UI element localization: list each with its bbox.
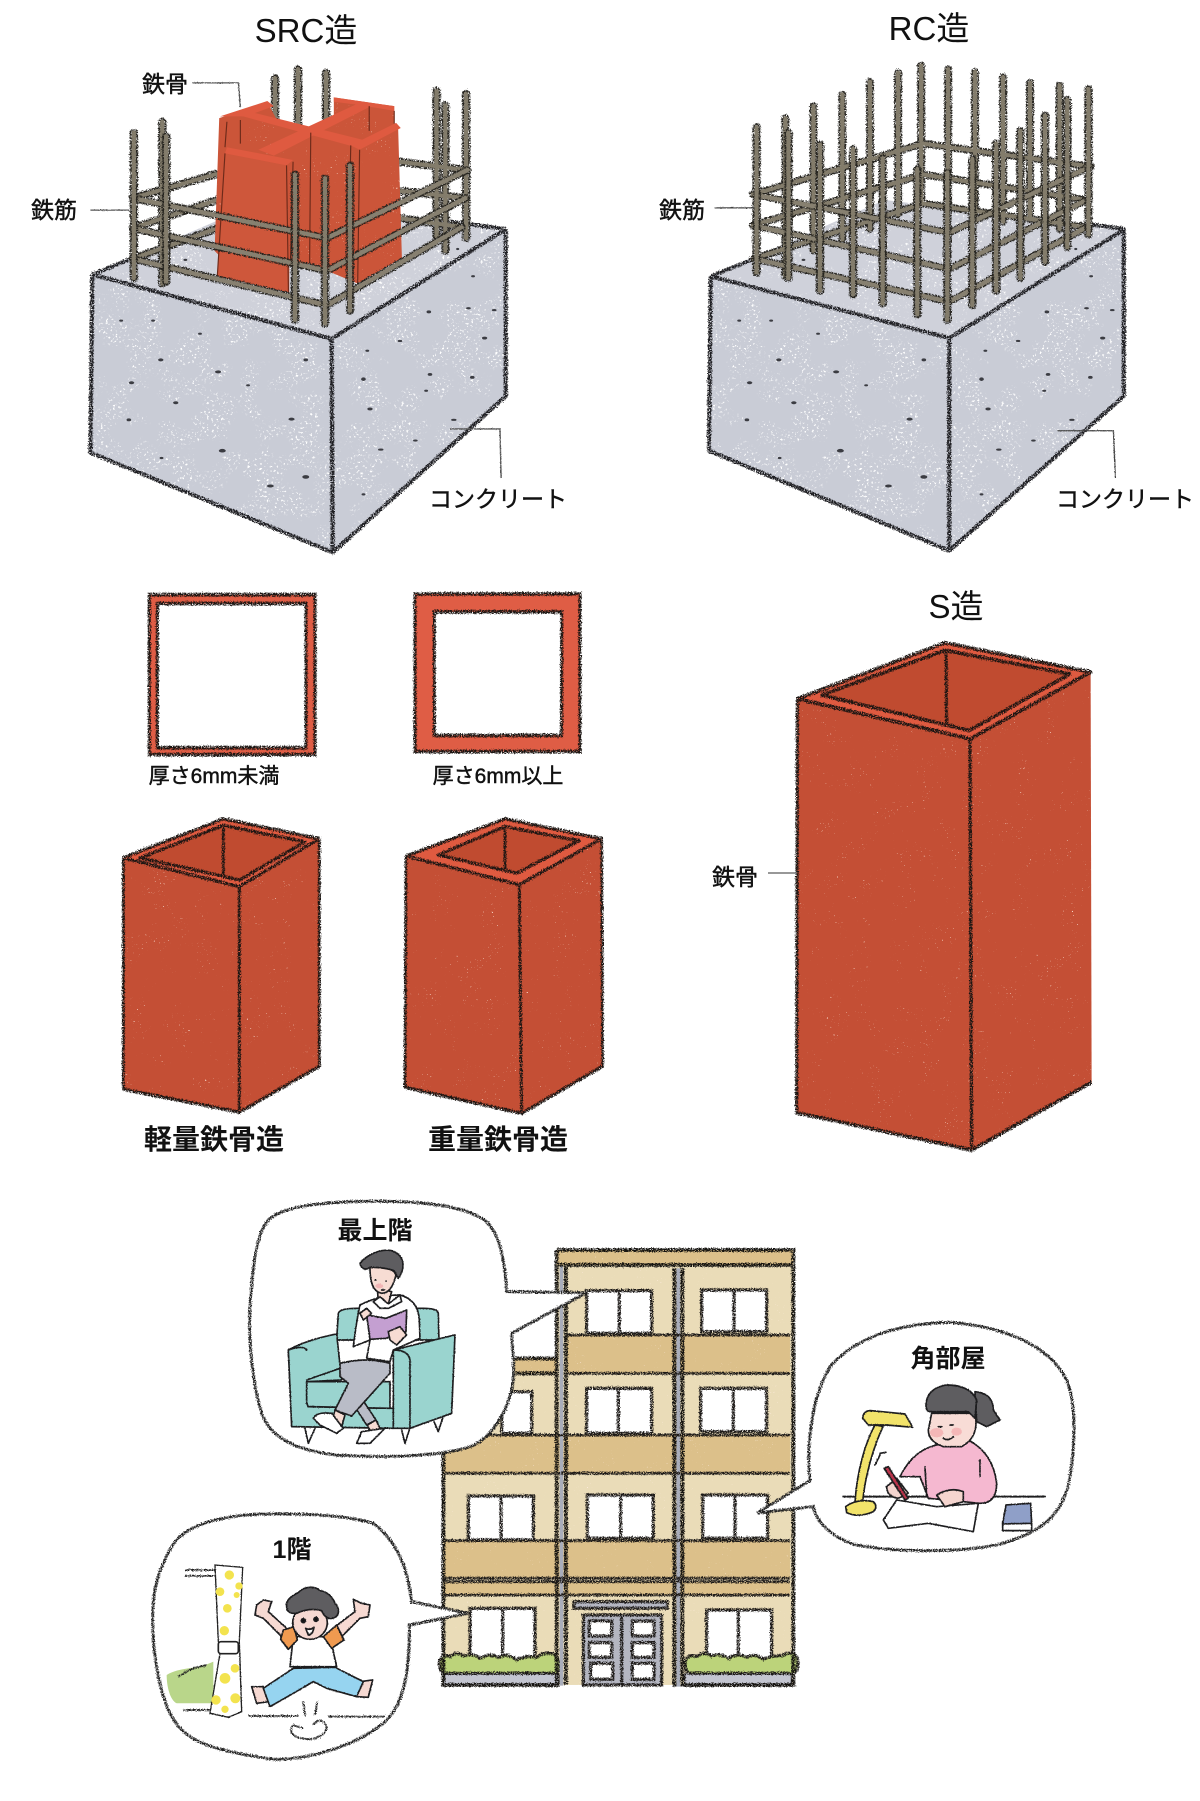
panel: RC construction	[659, 10, 1194, 551]
illustration: girl studying at desk	[843, 1385, 1045, 1532]
illustration: apartment building	[439, 1250, 798, 1687]
label: first floor: 1階	[273, 1536, 311, 1564]
label: 6mm or more: 厚さ6mm以上	[433, 765, 563, 788]
label: light steel: 軽量鉄骨造	[144, 1124, 284, 1155]
front rebar	[133, 133, 467, 324]
leader lines	[90, 83, 501, 478]
concrete base	[90, 200, 506, 553]
callout: corner room	[757, 1322, 1074, 1551]
leader line: steel frame	[768, 872, 797, 874]
speech bubble	[757, 1322, 1074, 1551]
leader lines	[715, 208, 1115, 478]
label: steel frame: 鉄骨	[712, 864, 758, 890]
callout: first floor	[153, 1514, 468, 1759]
heading: RC: RC造	[889, 10, 969, 47]
illustration: thin and heavy steel	[123, 594, 603, 1113]
label: concrete: コンクリート	[429, 486, 567, 512]
rebar cage	[753, 65, 1090, 320]
pipes and structure lines	[443, 1250, 793, 1687]
illustration: S column	[797, 643, 1092, 1150]
label: heavy steel: 重量鉄骨造	[428, 1124, 568, 1155]
icon: thin section	[149, 595, 315, 755]
illustration: RC column with concrete base and rebar	[709, 65, 1125, 551]
label: rebar: 鉄筋	[659, 197, 705, 223]
label: top floor: 最上階	[337, 1217, 413, 1245]
heading: SRC: SRC造	[255, 12, 357, 49]
door and canopy	[574, 1602, 667, 1685]
illustration: jumping child	[252, 1587, 373, 1707]
building walls	[443, 1250, 793, 1685]
label: concrete: コンクリート	[1056, 486, 1194, 512]
panel: SRC construction	[31, 12, 567, 553]
panel: S construction	[712, 588, 1092, 1150]
callout: top floor	[250, 1201, 587, 1457]
illustration: SRC column with concrete base, steel frame and rebar	[90, 69, 506, 553]
windows	[468, 1290, 772, 1660]
planters	[439, 1653, 798, 1685]
illustration: window, curtain and shrub	[167, 1565, 385, 1739]
steel frame	[215, 97, 402, 293]
panel: steel thickness comparison	[123, 594, 603, 1155]
icon: thick section	[415, 594, 580, 752]
speech bubble	[153, 1514, 468, 1759]
label: steel frame: 鉄骨	[142, 71, 188, 97]
icon: heavy steel column	[405, 819, 603, 1113]
heading: S: S造	[928, 588, 984, 625]
label: corner room: 角部屋	[910, 1345, 986, 1373]
label: under 6mm: 厚さ6mm未満	[149, 765, 279, 788]
concrete base	[709, 200, 1125, 551]
icon: light steel column	[123, 819, 319, 1112]
rear rebar	[133, 69, 467, 284]
illustration: man reading in armchair	[288, 1250, 455, 1443]
speech bubble	[250, 1201, 587, 1457]
label: rebar: 鉄筋	[31, 197, 77, 223]
